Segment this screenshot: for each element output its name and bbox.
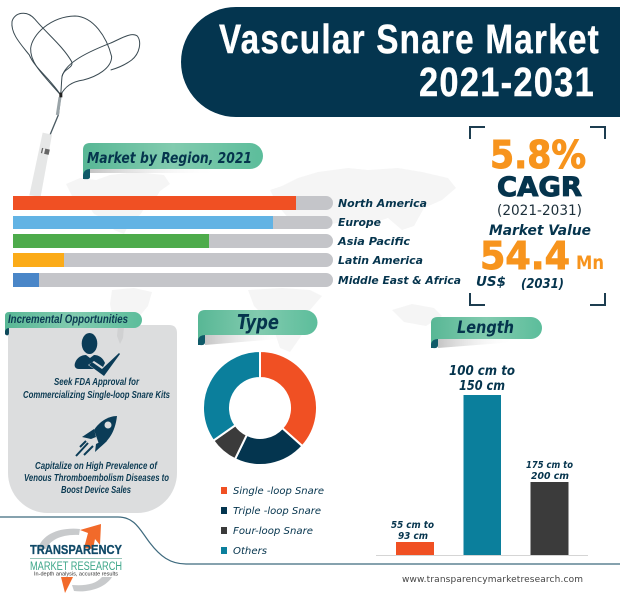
bar: 100 cm to 150 cm: 100 cm to xyxy=(449,364,515,379)
text: FDA approval xyxy=(23,376,170,401)
legend: type xyxy=(221,486,324,557)
title banner xyxy=(181,7,620,117)
legend item: triple-loop: Triple -loop Snare xyxy=(233,506,321,517)
CAGR period: (2021-2031) xyxy=(497,203,582,219)
bar: 100 cm to 150 cm: 150 cm xyxy=(459,379,505,394)
bar: North America xyxy=(13,196,333,210)
market value label: Market Value xyxy=(489,223,591,239)
logo sub wordmark: MARKET RESEARCH xyxy=(30,561,122,573)
text: FDA approval: Seek FDA Approval for xyxy=(54,376,140,388)
label: Middle East & Africa: Middle East & Africa xyxy=(338,274,461,287)
text: VTE opportunity xyxy=(24,460,169,496)
bar: Europe xyxy=(13,216,332,229)
label: Latin America: Latin America xyxy=(338,254,423,267)
icon: rocket xyxy=(76,416,117,456)
ribbon: incremental opportunities xyxy=(5,312,142,335)
bar: 55 cm to 93 cm: 55 cm to xyxy=(391,520,434,531)
logo: Transparency Market Research xyxy=(30,524,122,593)
website url: www.transparencymarketresearch.com xyxy=(402,575,583,585)
bar: 175 cm to 200 cm xyxy=(526,460,573,555)
icon: person with check xyxy=(75,333,120,376)
forecast year: (2031) xyxy=(521,277,564,292)
text: VTE opportunity: Boost Device Sales xyxy=(61,484,131,496)
currency: US$ xyxy=(476,275,506,290)
legend item: four-loop: Four-loop Snare xyxy=(233,526,313,537)
label: Asia Pacific: Asia Pacific xyxy=(337,235,410,248)
bar: Middle East & Africa xyxy=(13,273,333,287)
logo tagline: In-depth analysis, accurate results xyxy=(34,572,119,578)
bar: 100 cm to 150 cm xyxy=(449,364,515,555)
CAGR value: 5.8% xyxy=(490,133,586,177)
icon: vascular snare device xyxy=(12,13,140,197)
bar: 55 cm to 93 cm xyxy=(391,520,434,555)
text: VTE opportunity: Venous Thromboembolism Diseases to xyxy=(24,472,169,484)
background world map xyxy=(66,168,456,352)
CAGR label: CAGR xyxy=(497,172,582,203)
heading: Incremental Opportunities xyxy=(8,314,128,326)
panel: incremental opportunities xyxy=(5,312,177,513)
donut chart: type xyxy=(203,351,317,465)
bar: 175 cm to 200 cm: 175 cm to xyxy=(526,460,573,471)
bar: 55 cm to 93 cm: 93 cm xyxy=(398,531,428,542)
heading: Type xyxy=(237,310,279,334)
market value number: 54.4 xyxy=(480,234,570,278)
legend item: others: Others xyxy=(233,546,267,557)
ribbon: type xyxy=(198,310,318,345)
text: FDA approval: Commercializing Single-loop Snare Kits xyxy=(23,389,170,401)
bar: Asia Pacific xyxy=(13,234,333,248)
segment: four-loop snare xyxy=(213,425,247,459)
bar: Latin America xyxy=(13,253,333,267)
bar chart: market by region xyxy=(13,196,333,287)
text: VTE opportunity: Capitalize on High Prevalence of xyxy=(35,460,158,472)
segment: single-loop snare xyxy=(260,351,317,446)
label: Europe: Europe xyxy=(338,216,382,229)
segment: triple-loop snare xyxy=(235,428,302,465)
bar chart: length xyxy=(376,364,588,556)
segment: others xyxy=(203,351,260,441)
label: North America: North America xyxy=(338,197,427,210)
ribbon: length xyxy=(431,317,542,348)
legend item: single-loop: Single -loop Snare xyxy=(233,486,324,497)
heading: Market by Region, 2021 xyxy=(87,149,252,167)
callout: CAGR and market value xyxy=(470,127,605,305)
market value unit: Mn xyxy=(576,252,604,274)
ribbon: market by region xyxy=(83,143,263,179)
bar: 175 cm to 200 cm: 200 cm xyxy=(531,471,569,482)
logo wordmark: TRANSPARENCY xyxy=(30,542,122,557)
region labels xyxy=(337,197,461,287)
heading: Length xyxy=(457,318,514,338)
